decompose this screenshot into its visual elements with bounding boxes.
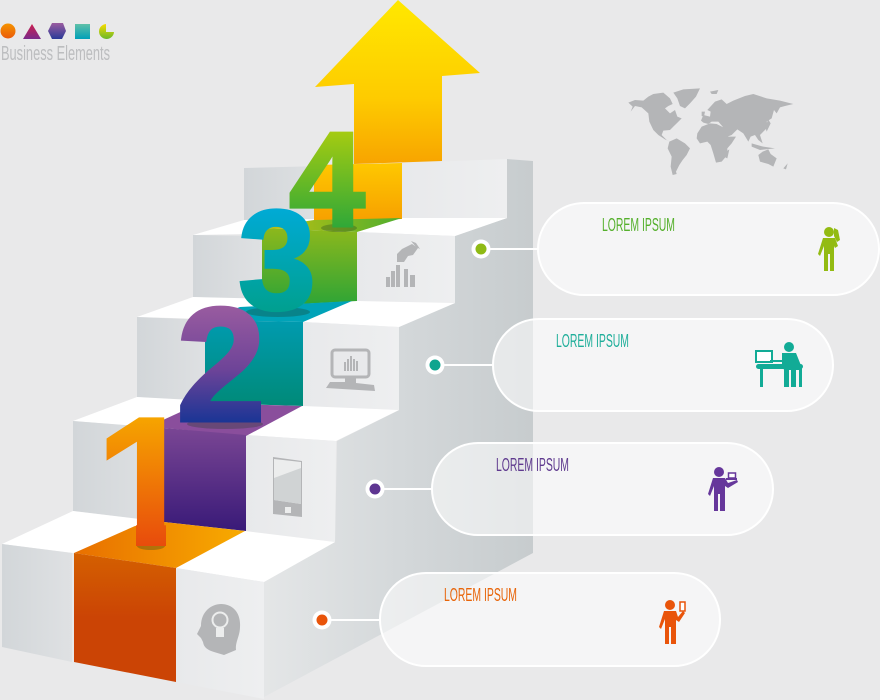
icon: person at desk: [756, 342, 803, 387]
panel: green pill: [538, 203, 879, 295]
right side wall: [264, 159, 533, 697]
green band top: [262, 218, 402, 232]
number shadows: [137, 224, 357, 550]
arrow lower shaft: [314, 163, 402, 221]
icon: person with laptop: [708, 467, 738, 511]
panel: orange pill: [380, 573, 720, 666]
staircase: [2, 159, 533, 699]
connector: step 2: [366, 480, 432, 498]
label: LOREM IPSUM: [556, 331, 629, 351]
arrow head and shaft: [315, 0, 480, 164]
step 1 top: [2, 511, 335, 582]
icon: person with tablet: [659, 600, 685, 644]
number 3: 3: [238, 181, 316, 340]
step 3 face left: [137, 317, 210, 403]
back step face left: [244, 166, 322, 222]
step 4 face left: [193, 235, 262, 300]
step 4 top: [193, 218, 507, 236]
label: LOREM IPSUM: [602, 215, 675, 235]
logo: business elements: [0, 23, 114, 65]
back step face right: [402, 159, 507, 220]
panel: teal pill: [493, 319, 833, 411]
step icon: head with light bulb: [197, 604, 240, 655]
logo text: Business Elements: [1, 43, 110, 65]
step 2 face left: [73, 421, 164, 522]
icon: person on phone: [818, 227, 840, 271]
label: LOREM IPSUM: [496, 455, 569, 475]
number 2: 2: [176, 273, 266, 456]
icon: purple hexagon: [48, 23, 66, 39]
step icon: phone: [273, 457, 302, 517]
step 2 top: [73, 397, 399, 441]
teal band top: [205, 301, 352, 322]
connector: step 4: [472, 240, 538, 258]
step 4 face right: [357, 232, 455, 303]
icon: green pie: [99, 24, 114, 39]
step icon: monitor: [326, 350, 375, 391]
step 1 face left: [2, 544, 72, 662]
purple band front: [164, 428, 246, 531]
coloured path: [74, 218, 402, 682]
world map: [628, 88, 793, 175]
orange band top: [74, 522, 245, 568]
green band front: [262, 228, 357, 306]
teal band front: [205, 320, 303, 406]
step icon: hand on chart: [386, 241, 420, 287]
step 3 face right: [303, 322, 399, 410]
number 4: 4: [289, 104, 365, 255]
connector: step 1: [312, 610, 380, 630]
purple band top: [163, 403, 302, 436]
panel: purple pill: [432, 443, 773, 535]
step 2 face right: [246, 435, 336, 542]
label: LOREM IPSUM: [444, 585, 517, 605]
step 1 face right: [176, 568, 264, 699]
icon: red triangle: [23, 24, 41, 39]
step 3 top: [137, 297, 455, 327]
orange band front: [74, 553, 176, 682]
number 1: 1: [95, 378, 197, 584]
arrow: [314, 0, 480, 221]
connector: step 3: [426, 356, 493, 374]
icon: orange circle: [0, 24, 16, 38]
icon: teal square: [75, 24, 90, 39]
